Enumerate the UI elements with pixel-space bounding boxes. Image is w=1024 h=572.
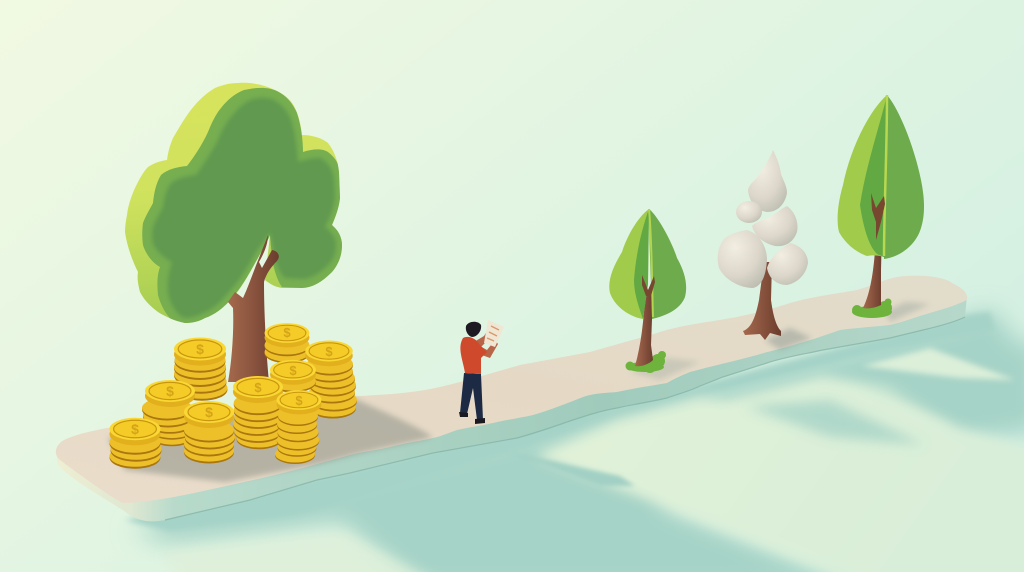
coin stack B: $	[166, 383, 174, 399]
platform top surface	[56, 276, 967, 503]
coin stack C	[110, 418, 162, 469]
grass	[626, 351, 666, 373]
coin stack F	[264, 323, 310, 363]
stone tree	[718, 150, 808, 340]
coin stack F: $	[283, 325, 291, 340]
coin stack A: $	[196, 341, 204, 357]
coin stack B	[142, 380, 195, 446]
trunk	[228, 235, 279, 382]
platform side edge	[57, 296, 967, 521]
trunk	[863, 230, 882, 308]
coin stack G	[305, 341, 357, 418]
legs	[460, 373, 483, 420]
coin stack I: $	[295, 393, 303, 408]
small green tree	[609, 209, 686, 373]
coin stack E	[233, 376, 283, 449]
coin stack E: $	[254, 380, 262, 395]
big tree	[125, 83, 343, 382]
trunk and roots	[743, 262, 781, 340]
platform path	[56, 276, 967, 521]
crown face bevel	[142, 88, 343, 325]
crown front face	[152, 98, 336, 318]
branches	[642, 275, 655, 296]
large left stone	[718, 230, 767, 288]
coin stack C: $	[131, 421, 139, 437]
coin stack D: $	[205, 404, 213, 420]
shoes	[459, 412, 485, 424]
arms	[474, 331, 498, 358]
crown	[838, 95, 887, 257]
top stone	[748, 150, 787, 212]
coin stack D	[184, 401, 235, 464]
branches	[871, 193, 885, 240]
tall green tree	[838, 95, 924, 318]
map	[484, 320, 504, 347]
coin stack H	[270, 360, 316, 392]
crown	[609, 209, 649, 319]
head	[466, 322, 481, 337]
small stone	[736, 201, 762, 223]
coin stack I	[275, 390, 322, 464]
coin shadow on platform	[108, 398, 433, 482]
middle stone	[752, 206, 798, 246]
coin stack A	[174, 338, 228, 401]
grass	[852, 298, 892, 318]
shirt	[460, 337, 487, 374]
person reading a map	[459, 320, 504, 424]
trunk	[635, 293, 653, 366]
crown extrusion	[125, 83, 342, 323]
ground shadows	[125, 312, 1024, 572]
coin stack G: $	[325, 344, 333, 359]
coin stack H: $	[289, 363, 297, 378]
right stone	[767, 243, 808, 285]
